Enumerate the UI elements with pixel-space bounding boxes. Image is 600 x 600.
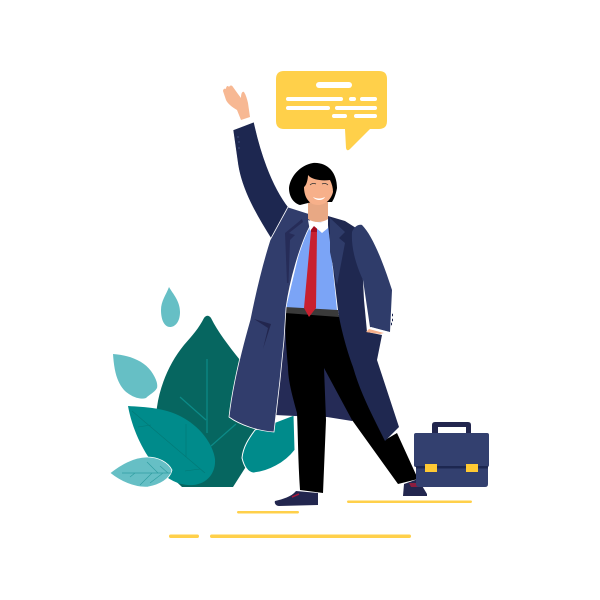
plant leaves xyxy=(110,287,295,487)
coat right front xyxy=(328,216,399,441)
shirt cuff xyxy=(370,327,389,334)
raised hand xyxy=(223,86,250,120)
pocket xyxy=(254,319,271,349)
coat back panel xyxy=(275,315,375,421)
right sleeve xyxy=(352,225,392,332)
leaf: light teal xyxy=(113,354,157,399)
tie xyxy=(304,226,317,317)
right shoe xyxy=(403,479,427,496)
leaf: small pale xyxy=(110,457,172,487)
speech bubble xyxy=(276,71,387,150)
neck xyxy=(308,198,328,222)
sleeve buttons xyxy=(391,315,393,324)
coat left front xyxy=(229,207,310,432)
leaf: falling drop xyxy=(161,287,180,327)
leaf: right teal xyxy=(242,415,295,473)
left shoe xyxy=(275,491,318,506)
collar xyxy=(308,220,328,233)
right hand xyxy=(366,329,384,334)
eyes xyxy=(310,183,328,185)
left lapel dark edge xyxy=(285,219,303,283)
leaf: big dark teal xyxy=(150,316,256,487)
smile xyxy=(313,197,325,200)
head xyxy=(289,163,337,205)
raised sleeve xyxy=(233,122,289,240)
clasps xyxy=(425,464,437,472)
briefcase xyxy=(414,422,489,487)
right lapel xyxy=(330,218,345,285)
legs xyxy=(285,312,418,493)
belt xyxy=(285,307,339,317)
shirt xyxy=(286,222,337,310)
businessman xyxy=(223,86,427,506)
leaf: mid teal xyxy=(128,406,215,485)
hair xyxy=(289,163,337,205)
ground lines xyxy=(169,500,472,538)
face xyxy=(304,175,333,205)
